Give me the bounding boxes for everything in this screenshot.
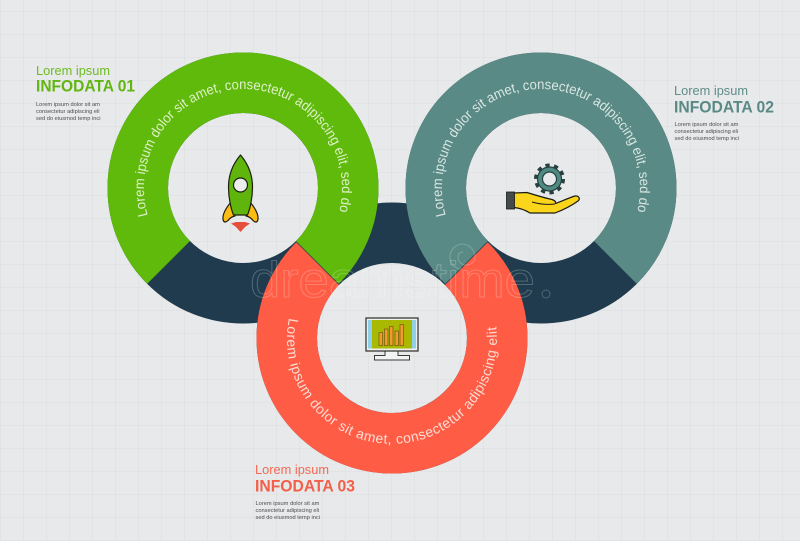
label: infodata 02: INFODATA 02 [674, 98, 774, 116]
label: infodata 02: sed do eiusmod temp inci [674, 136, 739, 142]
icon: hand with gear [506, 166, 579, 213]
dark connecting rings [138, 83, 646, 443]
label: infodata 03: sed do eiusmod temp inci [256, 515, 320, 521]
label: infodata 01: consectetur adipiscing eli [36, 109, 100, 115]
cuff [506, 192, 514, 209]
label: infodata 02 [674, 83, 774, 142]
watermark: dreamstime [250, 252, 535, 308]
label: infodata 01 [36, 63, 135, 122]
label: infodata 03 [255, 462, 355, 521]
ring: red segment [287, 264, 497, 443]
label: infodata 03: Lorem ipsum [255, 462, 329, 477]
label: infodata 01: INFODATA 01 [36, 76, 135, 96]
hand [514, 192, 579, 213]
label: infodata 02: Lorem ipsum dolor sit am [674, 122, 739, 128]
label: infodata 03: Lorem ipsum dolor sit am [256, 501, 320, 507]
curved text: teal ring: Lorem ipsum dolor sit amet, consectetur adipiscing elit, sed do [433, 82, 650, 217]
label: infodata 02: consectetur adipiscing eli [674, 129, 738, 135]
label: infodata 01: sed do eiusmod temp inci [36, 116, 100, 122]
ring: teal segment [436, 83, 646, 262]
curved text: green ring: Lorem ipsum dolor sit amet, consectetur adipiscing elit, sed do [135, 82, 352, 217]
gear [536, 166, 563, 192]
label: infodata 03: consectetur adipiscing eli [256, 508, 319, 514]
icon: monitor with bar chart [366, 318, 418, 360]
label: infodata 03: INFODATA 03 [255, 476, 355, 496]
icon: rocket [223, 155, 258, 232]
label: infodata 01: Lorem ipsum dolor sit am [36, 102, 100, 108]
label: infodata 02: Lorem ipsum [674, 83, 748, 98]
curved text: red ring: Lorem ipsum dolor sit amet, consectetur adipiscing elit [286, 319, 499, 446]
label: infodata 01: Lorem ipsum [36, 63, 110, 78]
ring: green segment [138, 83, 348, 262]
